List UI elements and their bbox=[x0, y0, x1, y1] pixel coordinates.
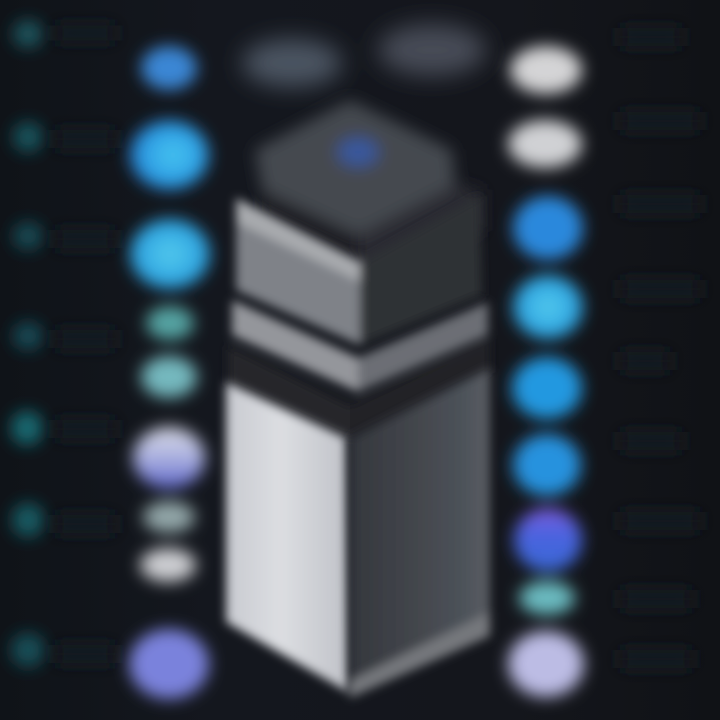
tower: top cap bbox=[255, 100, 482, 290]
top clouds bbox=[242, 24, 486, 87]
tower: dark right face bbox=[348, 368, 490, 698]
left column: faint text placeholders bbox=[55, 25, 115, 663]
inner left column: icon orbs bbox=[129, 46, 210, 699]
tower: upper module bbox=[236, 195, 482, 345]
left column: teal markers bbox=[11, 20, 45, 667]
tower: white left face bbox=[226, 382, 348, 692]
central server tower bbox=[226, 100, 490, 698]
tower: middle band bbox=[228, 300, 490, 440]
inner right column: icon orbs bbox=[508, 46, 584, 697]
right column: faint text placeholders bbox=[620, 28, 700, 668]
